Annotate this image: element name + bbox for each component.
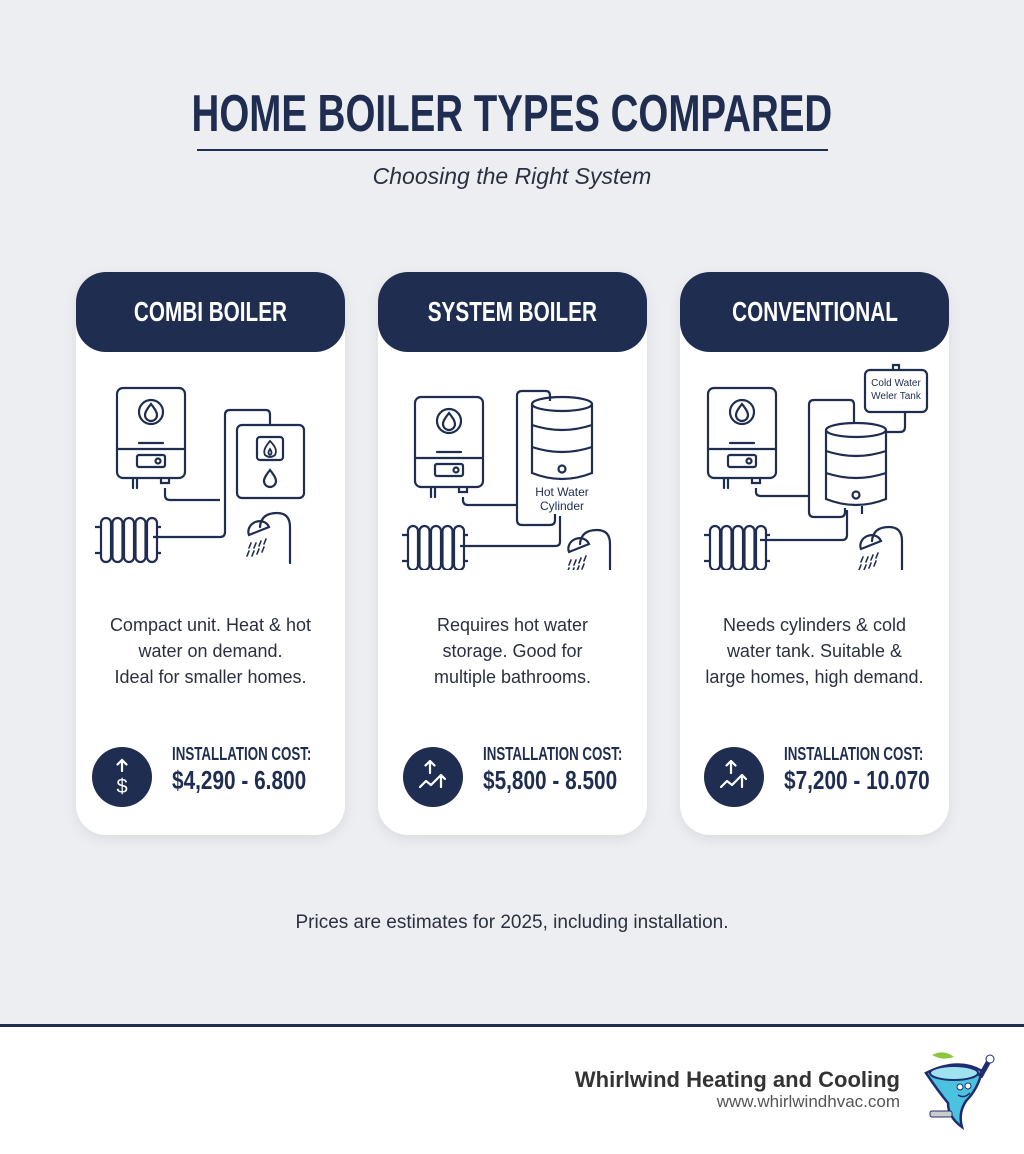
cost: conventional: INSTALLATION COST:	[784, 744, 923, 764]
heading: conventional	[680, 272, 949, 352]
description: conventional: large homes, high demand.	[705, 667, 924, 687]
panel: combi boiler	[76, 272, 345, 835]
subtitle: Choosing the Right System	[373, 163, 651, 189]
cost: system	[403, 744, 622, 807]
description: combi: Ideal for smaller homes.	[114, 667, 307, 687]
footnote: Prices are estimates for 2025, including installation.	[295, 912, 728, 933]
description: combi: Compact unit. Heat & hot	[110, 615, 311, 635]
title underline	[197, 149, 828, 151]
icon: dollar up	[92, 747, 152, 807]
footer band	[0, 1024, 1024, 1154]
website: www.whirlwindhvac.com	[717, 1092, 900, 1111]
cost: system: INSTALLATION COST:	[483, 744, 622, 764]
panel: system boiler	[378, 272, 647, 835]
heading: combi boiler	[76, 272, 345, 352]
illustration: system with cylinder: Hot Water	[535, 485, 589, 499]
cost: combi	[92, 744, 311, 807]
description: system: multiple bathrooms.	[434, 667, 591, 687]
cost: conventional: $7,200 - 10.070	[784, 765, 930, 795]
cost: system: $5,800 - 8.500	[483, 765, 617, 795]
description: conventional	[705, 615, 924, 687]
cost: conventional	[704, 744, 930, 807]
cost: combi: $4,290 - 6.800	[172, 765, 306, 795]
panel: conventional	[680, 272, 949, 835]
logo: tornado mascot	[924, 1052, 994, 1130]
description: conventional: Needs cylinders & cold	[723, 615, 906, 635]
description: system	[434, 615, 591, 687]
heading: combi boiler: COMBI BOILER	[134, 296, 287, 327]
description: conventional: water tank. Suitable &	[727, 641, 902, 661]
company name: Whirlwind Heating and Cooling	[575, 1067, 900, 1092]
description: combi	[110, 615, 311, 687]
illustration: conventional with tank: Cold Water	[871, 378, 921, 389]
cost: combi: INSTALLATION COST:	[172, 744, 311, 764]
heading: system boiler	[378, 272, 647, 352]
illustration: conventional with tank	[704, 364, 928, 570]
heading: conventional: CONVENTIONAL	[732, 296, 897, 327]
illustration: system with cylinder	[402, 390, 612, 570]
heading: system boiler: SYSTEM BOILER	[428, 296, 597, 327]
description: combi: water on demand.	[138, 641, 283, 661]
illustration: combi system	[95, 386, 306, 564]
icon: dollar up: $	[116, 776, 128, 798]
icon: trend up	[403, 747, 463, 807]
illustration: conventional with tank: Weler Tank	[871, 391, 922, 402]
title: HOME BOILER TYPES COMPARED	[192, 85, 832, 143]
illustration: system with cylinder: Cylinder	[540, 499, 584, 513]
description: system: Requires hot water	[437, 615, 588, 635]
description: system: storage. Good for	[442, 641, 583, 661]
icon: trend up	[704, 747, 764, 807]
